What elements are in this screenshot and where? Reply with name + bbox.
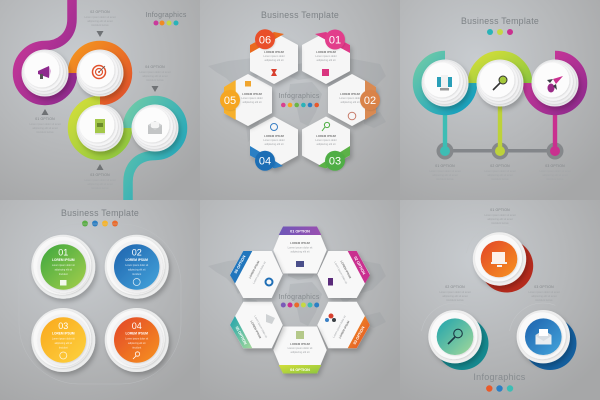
circle 03 [31, 308, 95, 372]
option 04 text: 04 OPTION [145, 65, 165, 69]
arrow down 04 [152, 86, 158, 92]
hexagon 03: Lorem ipsum dolor [315, 138, 337, 142]
circle 01: LOREM IPSUM [52, 258, 75, 262]
hexagon 04: LOREM IPSUM [264, 134, 285, 138]
hexagon 03: adipiscing elit sit [317, 142, 336, 146]
option 01 text: Lorem ipsum dolor sit amet [484, 213, 516, 217]
hexagon 04: Lorem ipsum dolor sit [288, 346, 313, 350]
icon: magnifier [493, 76, 507, 90]
discs [22, 50, 178, 152]
hexagon 05: 05 [224, 95, 236, 107]
hexagon 02 [317, 251, 370, 298]
options text: adipiscing elit sit amet [542, 173, 568, 177]
connector bar [445, 149, 555, 152]
option 01 text: 01 OPTION [490, 208, 510, 212]
circle 03: 03 [58, 321, 68, 331]
hexagon 03 [302, 116, 350, 171]
option 04 text: adipiscing elit sit amet [142, 74, 168, 78]
hexagon 01 [302, 30, 350, 84]
option 02 text: tincidunt luctus [91, 23, 109, 27]
option 03 text: tincidunt luctus [535, 298, 553, 302]
hexagon 03: 03 [329, 156, 341, 168]
option 02 text [84, 10, 116, 27]
circle 03: Lorem ipsum dolor sit [52, 337, 75, 340]
hexagon 06: 06 [259, 34, 271, 46]
circle 03: tincidunt [59, 346, 68, 349]
center label: Infographics [278, 93, 320, 100]
option 02 text: Lorem ipsum dolor sit amet [439, 290, 471, 294]
options text: adipiscing elit sit amet [487, 173, 513, 177]
options text: adipiscing elit sit amet [432, 173, 458, 177]
hexagon 02: LOREM IPSUM [339, 260, 353, 280]
hexagon 05: adipiscing elit sit [243, 100, 262, 104]
hexagon 06: Lorem ipsum dolor [263, 54, 285, 58]
option 04 text: Lorem ipsum dolor sit amet [139, 70, 171, 74]
circle 04: Lorem ipsum dolor sit [125, 337, 148, 340]
options text: tincidunt luctus [436, 177, 454, 181]
option 02 text: 02 OPTION [445, 285, 465, 289]
hexagon 03 [317, 302, 370, 348]
option 02 text: adipiscing elit sit amet [442, 294, 468, 298]
hexagon 06: Lorem ipsum dolor sit [252, 260, 267, 284]
legend dots [487, 29, 513, 35]
option 01 text [29, 117, 61, 134]
circle 02: tincidunt [132, 273, 141, 276]
hexagon 01: 01 [329, 34, 341, 46]
hexagon 05 [220, 74, 272, 126]
options text: 01 OPTION [435, 164, 455, 168]
hexagon 04: LOREM IPSUM [290, 342, 311, 346]
option 03 text [84, 173, 116, 190]
hexagon 05: Lorem ipsum dolor sit [253, 315, 269, 339]
option 01 text: adipiscing elit sit amet [32, 126, 58, 130]
hexagon 02 [328, 74, 380, 126]
options text: Lorem ipsum dolor sit amet [484, 169, 516, 173]
hexagon 03: 03 OPTION [353, 326, 366, 345]
panel: three step timeline [418, 16, 582, 181]
option 02 text: 02 OPTION [90, 10, 110, 14]
hexagon 01: adipiscing elit sit [291, 250, 310, 254]
hexagon 01: Lorem ipsum dolor sit [288, 246, 313, 250]
hexagon 04: 04 [259, 156, 271, 168]
stems and nodes [436, 106, 564, 160]
circle 04: LOREM IPSUM [125, 332, 148, 336]
heading: business template: Business Template [461, 16, 539, 26]
world map [208, 258, 386, 342]
option 01 text: adipiscing elit sit amet [487, 217, 513, 221]
circle 02: Lorem ipsum dolor sit [125, 264, 148, 267]
option 02 text: adipiscing elit sit amet [87, 19, 113, 23]
hexagon 02: Lorem ipsum dolor [339, 96, 361, 100]
hexagon 05: Lorem ipsum dolor [241, 96, 263, 100]
option 03 text: 03 OPTION [90, 173, 110, 177]
legend dots [82, 220, 118, 226]
world map [208, 58, 386, 142]
hexagon 01: LOREM IPSUM [316, 50, 337, 54]
arrow down 02 [96, 31, 104, 37]
panel: three circles with offset shadow discs [416, 208, 582, 392]
hexagon 01: 01 OPTION [290, 229, 310, 233]
hexagon 06 [230, 251, 283, 298]
hexagon 05: LOREM IPSUM [242, 92, 263, 96]
arrow up 01 [42, 109, 48, 115]
options text: tincidunt luctus [491, 177, 509, 181]
hexagon 02: LOREM IPSUM [340, 92, 361, 96]
option 03 text: tincidunt luctus [91, 186, 109, 190]
circle 04: 04 [132, 321, 142, 331]
option 03 text: adipiscing elit sit amet [531, 294, 557, 298]
icon: envelope [148, 121, 162, 134]
option 02 text: tincidunt luctus [446, 298, 464, 302]
heading: business template: Business Template [261, 10, 339, 20]
panel: winding path timeline [17, 0, 187, 200]
circle 03 [517, 310, 576, 370]
hexagon 02: adipiscing elit sit [341, 100, 360, 104]
outline decoration [19, 224, 181, 384]
options text: Lorem ipsum dolor sit amet [429, 169, 461, 173]
hexagon 06: LOREM IPSUM [264, 50, 285, 54]
option 03 text: Lorem ipsum dolor sit amet [528, 290, 560, 294]
circle 01 [473, 232, 533, 292]
circle 01: tincidunt [59, 273, 68, 276]
icon: book [95, 119, 105, 134]
decoration arcs [416, 220, 582, 376]
panel: six option hexagons [208, 226, 386, 374]
hexagon 01: LOREM IPSUM [290, 241, 311, 245]
icon: target [92, 66, 106, 78]
hexagon 04 [250, 116, 298, 171]
rings [418, 56, 582, 110]
hexagon 04: 04 OPTION [290, 368, 310, 372]
options text: tincidunt luctus [546, 177, 564, 181]
options text: 02 OPTION [490, 164, 510, 168]
option 01 text [484, 208, 516, 225]
heading: infographics: Infographics [145, 12, 187, 19]
circle 04: adipiscing elit sit [128, 342, 146, 345]
option 03 text: 03 OPTION [534, 285, 554, 289]
option 01 text: Lorem ipsum dolor sit amet [29, 122, 61, 126]
option 01 text: 01 OPTION [35, 117, 55, 121]
option 03 text [528, 285, 560, 302]
icon: rocket [547, 76, 563, 92]
circle 02 [105, 235, 169, 299]
options text: Lorem ipsum dolor sit amet [539, 169, 571, 173]
icon: tablet book [437, 75, 452, 90]
hexagon 02: Lorem ipsum dolor sit [333, 261, 349, 285]
hexagon 04: adipiscing elit sit [265, 142, 284, 146]
hexagon 01: adipiscing elit sit [317, 58, 336, 62]
center dots [281, 302, 319, 308]
circle 02: 02 [132, 248, 142, 258]
hexagon 05: LOREM IPSUM [249, 320, 263, 340]
hexagon 02: 02 [364, 95, 376, 107]
center label: Infographics [278, 294, 320, 301]
circle 04: tincidunt [132, 346, 141, 349]
hexagon 06: LOREM IPSUM [248, 259, 261, 279]
discs [422, 60, 578, 106]
hexagon 04 [273, 326, 327, 374]
hexagon 06: 06 OPTION [234, 255, 247, 274]
hexagon 03: Lorem ipsum dolor sit [332, 314, 347, 338]
hexagon 01 [273, 226, 327, 274]
hexagon 03: LOREM IPSUM [338, 319, 351, 339]
option 04 text [139, 65, 171, 82]
option 01 text: tincidunt luctus [491, 221, 509, 225]
panel: hexagon ring 01-06 [208, 10, 386, 171]
hexagon 03: LOREM IPSUM [316, 134, 337, 138]
circle 04 [105, 308, 169, 372]
options text: 03 OPTION [545, 164, 565, 168]
hexagon 06: adipiscing elit sit [265, 58, 284, 62]
option 04 text: tincidunt luctus [146, 78, 164, 82]
option 02 text [439, 285, 471, 302]
circle 01: 01 [58, 248, 68, 258]
circle 02: adipiscing elit sit [128, 268, 146, 272]
circle 03: adipiscing elit sit [55, 342, 72, 345]
hexagon 01: Lorem ipsum dolor [315, 54, 337, 58]
options text [429, 164, 571, 181]
center dots [281, 103, 319, 107]
hexagon 02: 02 OPTION [353, 256, 366, 275]
circle 01: Lorem ipsum dolor sit [52, 264, 75, 267]
heading: infographics: Infographics [473, 372, 526, 382]
hexagon 04: Lorem ipsum dolor [263, 138, 285, 142]
option 03 text: adipiscing elit sit amet [87, 182, 113, 186]
circle 03: LOREM IPSUM [52, 332, 75, 336]
legend dots [486, 385, 513, 392]
circle 02 [428, 310, 488, 370]
arrow up 03 [96, 164, 104, 170]
option 02 text: Lorem ipsum dolor sit amet [84, 15, 116, 19]
hexagon 05: 05 OPTION [234, 326, 247, 345]
option 01 text: tincidunt luctus [36, 130, 54, 134]
panel: four numbered circles [19, 208, 181, 384]
option 03 text: Lorem ipsum dolor sit amet [84, 178, 116, 182]
circle 02: LOREM IPSUM [125, 258, 148, 262]
heading: business template: Business Template [61, 208, 139, 218]
legend dots [154, 20, 178, 26]
winding ribbon [17, 0, 182, 200]
hexagon 04: adipiscing elit sit [291, 350, 310, 354]
circle 01: adipiscing elit sit [55, 268, 72, 272]
icon: megaphone [38, 66, 51, 79]
hexagon 05 [230, 302, 283, 348]
circle 01 [31, 235, 95, 299]
hexagon 06 [250, 29, 298, 84]
